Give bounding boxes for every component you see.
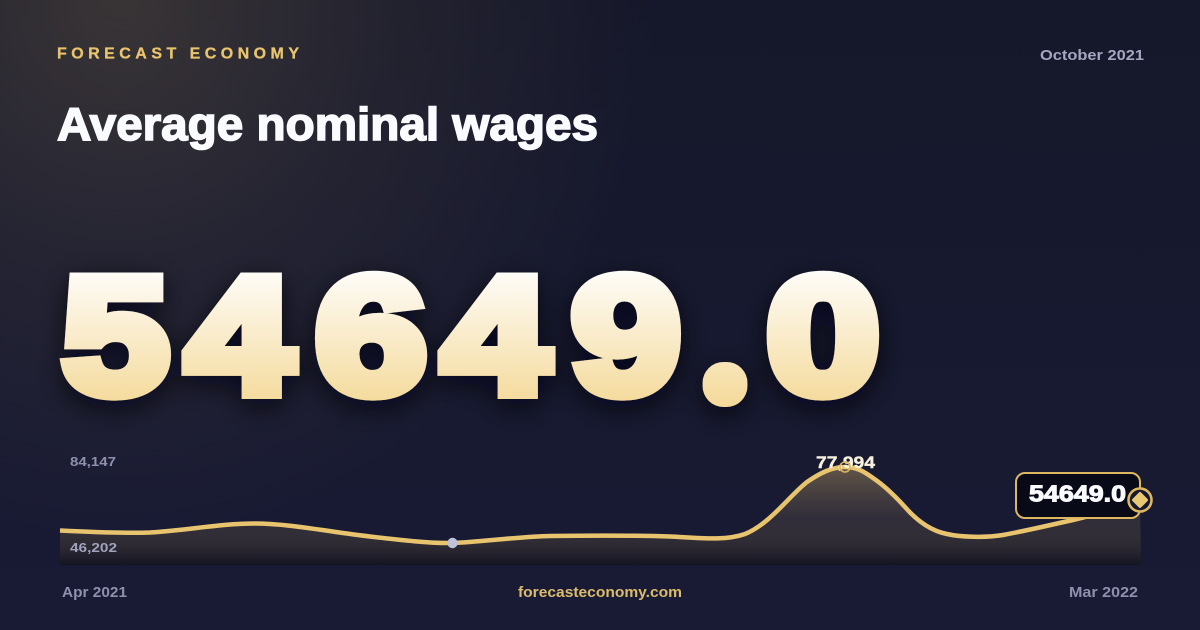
brand label: FORECAST ECONOMY — [57, 46, 299, 62]
axis max label: 84,147 — [70, 454, 116, 469]
end date: Mar 2022 — [1069, 584, 1138, 601]
area under line — [60, 467, 1141, 565]
current value callout: 54649.0 — [1029, 480, 1126, 506]
website: forecasteconomy.com — [518, 584, 682, 601]
current value callout — [1016, 473, 1140, 518]
title: Average nominal wages — [57, 98, 598, 150]
big value — [62, 243, 879, 428]
big value: . — [722, 369, 728, 391]
peak marker — [840, 462, 850, 472]
big value: 9 — [571, 244, 681, 428]
peak value label: 77,994 — [816, 453, 876, 472]
big value: 5 — [62, 243, 169, 428]
big value: 4 — [442, 243, 549, 428]
chart: wage sparkline — [60, 453, 1152, 565]
big value: 0 — [767, 244, 879, 428]
start date: Apr 2021 — [62, 584, 127, 601]
date: October 2021 — [1040, 47, 1144, 64]
gold line — [60, 467, 1140, 543]
low point marker — [447, 538, 458, 548]
big value: 6 — [316, 243, 427, 428]
current value marker — [1128, 488, 1152, 512]
big value: 4 — [186, 243, 293, 428]
axis min label: 46,202 — [70, 540, 117, 555]
